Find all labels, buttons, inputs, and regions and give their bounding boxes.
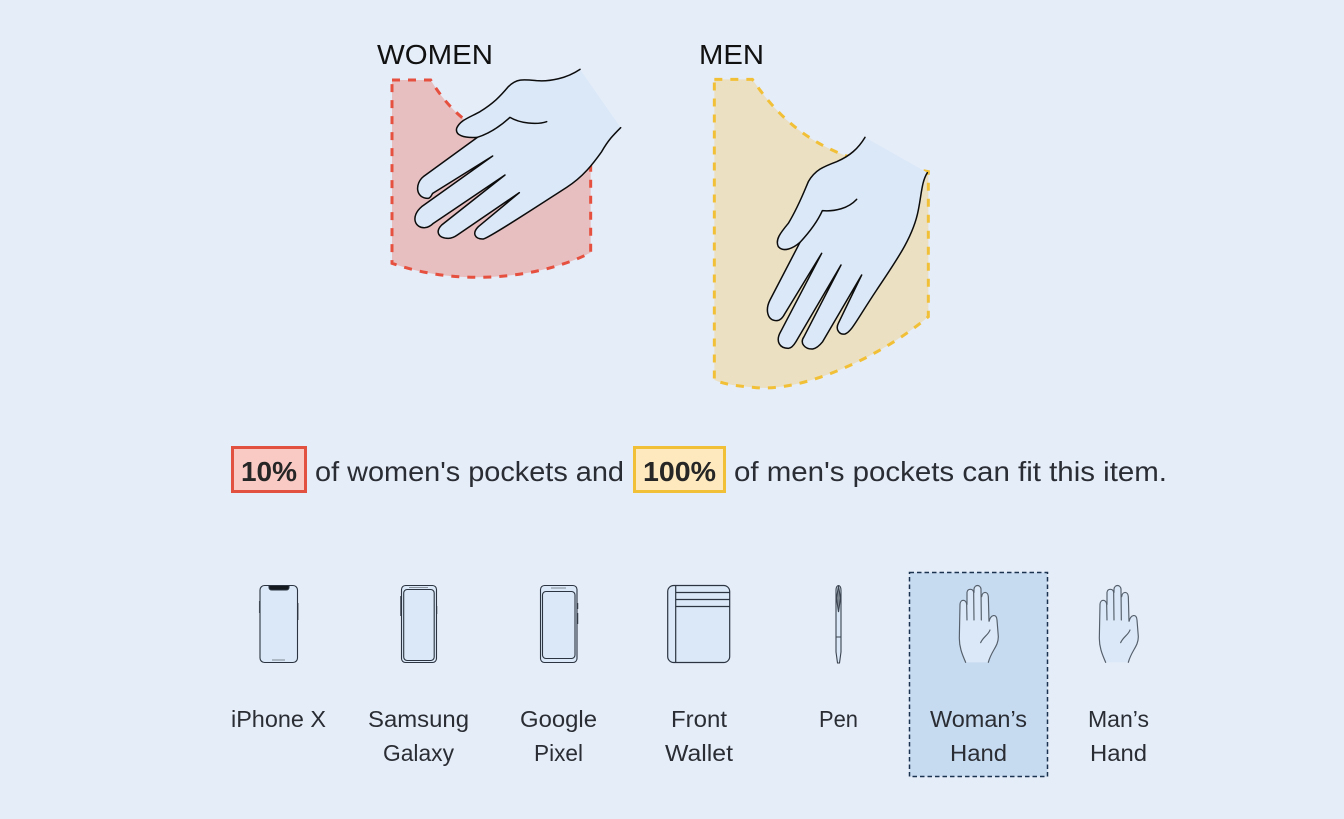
panel: women's pocket with hand [392, 69, 621, 277]
label: iPhone X: iPhone X [231, 706, 326, 732]
label: Front Wallet: Front [671, 706, 728, 732]
label: Google Pixel [520, 706, 597, 766]
label: Man's Hand [1088, 706, 1149, 766]
text: men's pockets: of men's pockets can fit this item. [734, 456, 1167, 487]
icon: Front Wallet [668, 586, 730, 662]
label: Samsung Galaxy: Samsung [368, 706, 469, 732]
label: Woman's Hand: Hand [950, 740, 1007, 766]
label: Man's Hand: Hand [1090, 740, 1147, 766]
callout: 10%: 10% [241, 456, 297, 487]
callout: 10% [232, 448, 306, 492]
pocket outline: men [714, 79, 928, 388]
heading: WOMEN: WOMEN [377, 39, 493, 70]
icon: woman's hand [959, 585, 998, 662]
icon: iPhone X [260, 586, 298, 662]
icon: Samsung Galaxy [401, 586, 436, 662]
label: Front Wallet: Wallet [665, 740, 734, 766]
heading: MEN: MEN [699, 39, 764, 70]
hand: men [767, 137, 927, 349]
statement sentence [232, 448, 1167, 492]
icon: Pen [836, 586, 841, 663]
label: Samsung Galaxy [368, 706, 469, 766]
label: Google Pixel: Pixel [534, 740, 583, 766]
label: Google Pixel: Google [520, 706, 597, 732]
label: Woman's Hand: Woman’s [930, 706, 1027, 732]
label: Pen: Pen [819, 706, 858, 732]
icon: Google Pixel [540, 586, 578, 662]
label: Man's Hand: Man’s [1088, 706, 1149, 732]
selection highlight: Woman's Hand [910, 572, 1048, 776]
callout: 100%: 100% [643, 456, 716, 487]
icon: man's hand [1099, 585, 1138, 662]
hand: women [415, 69, 621, 239]
label: Front Wallet [665, 706, 734, 766]
callout: 100% [634, 448, 724, 492]
pocket outline: women [392, 80, 591, 277]
label: Samsung Galaxy: Galaxy [383, 740, 454, 766]
text: women's pockets: of women's pockets and [315, 456, 624, 487]
label: Woman's Hand [930, 706, 1027, 766]
panel: men's pocket with hand [714, 79, 928, 388]
